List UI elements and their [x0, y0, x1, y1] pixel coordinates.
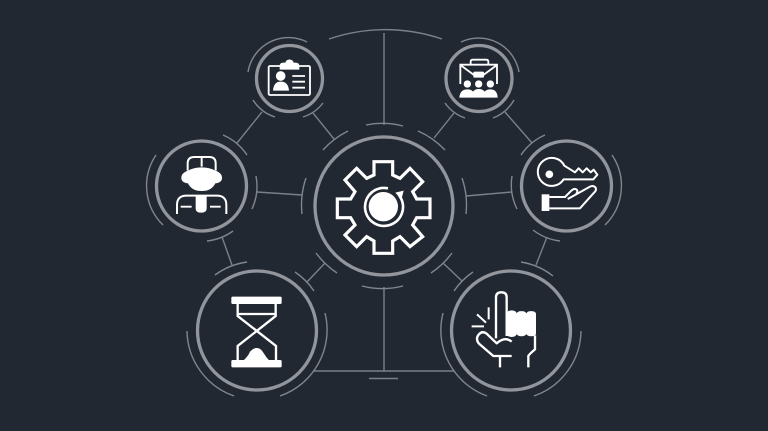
icon: briefcase and team: [459, 60, 498, 98]
icon: hourglass: [231, 297, 282, 367]
icon: person with cap: [177, 157, 226, 214]
node rings: [156, 46, 612, 390]
icon: key over open hand: [538, 158, 597, 211]
connector lines: [222, 30, 547, 378]
icon: gear with rotating arrow: [337, 162, 430, 253]
outer arcs: [147, 38, 621, 396]
icon: hand pointing up with click marks: [472, 292, 536, 367]
icon: ID badge: [269, 60, 310, 95]
